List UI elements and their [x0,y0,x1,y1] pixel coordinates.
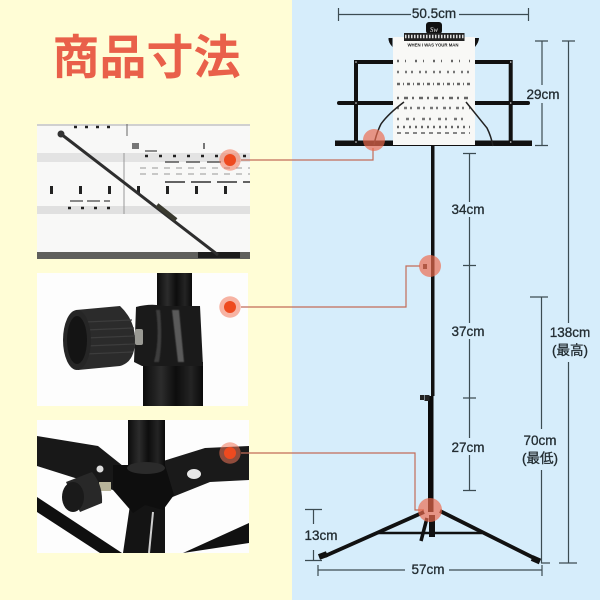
dimension: leg height 13cm: 13cm [304,528,338,543]
clip: Sw [430,26,438,34]
dimension: segment 37cm [451,266,485,398]
right arm [160,446,249,500]
white background [37,420,249,553]
title: 商品寸法 [52,31,240,84]
dimension: minimum height 70cm: 70cm [523,433,557,448]
sheet music [393,37,475,145]
arm hole [187,469,201,479]
lower braces [37,497,249,553]
dimension: maximum height 138cm: (最高) [552,342,588,358]
music stand [319,22,540,562]
panel: height adjustment knob photo [37,273,248,406]
dimension: segment 37cm: 37cm [451,324,485,339]
marker dot: panel 3 [219,442,241,464]
panel: tripod joint photo [37,420,249,553]
dimension: minimum height 70cm [522,297,558,563]
left background panel [0,0,292,600]
marker dot: panel 2 [219,296,241,318]
page holder arm [58,130,218,255]
leg gap [149,512,153,553]
frame joints [355,61,512,143]
sheet music background [37,124,250,259]
centre hub [113,465,174,513]
dimension: width 50.5cm: 50.5cm [412,6,456,21]
lower pole [143,362,203,406]
connector: panel 3 to tripod [241,453,424,510]
connector: panel 2 to height clamp [241,266,420,307]
song title: WHEN I WAS YOUR MAN [407,42,459,48]
dimension: base width 57cm: 57cm [411,562,445,577]
knob [62,472,111,512]
marker dot: panel 1 [219,149,241,171]
dimension: base width 57cm [318,562,542,577]
clip [388,22,479,47]
centre pole [420,146,434,512]
clamp body [134,305,203,366]
highlight circle: tripod joint [418,498,442,522]
white background [37,273,248,406]
dimension: segment 34cm [451,154,485,265]
panel: page holder arm photo [37,124,250,259]
highlight circle: height clamp [419,255,441,277]
dimension: desk height 29cm: 29cm [526,87,560,102]
knob [63,306,135,370]
dimension: segment 27cm: 27cm [451,440,485,455]
dimension: maximum height 138cm [550,41,590,563]
staff lines [397,61,470,133]
dimension: minimum height 70cm: (最低) [522,451,558,466]
staves [37,124,250,214]
upper pole [157,273,192,307]
highlight circle: page holder [363,129,385,151]
page holder arms [374,102,493,146]
dimension: width 50.5cm [338,6,528,21]
left arm [37,436,128,490]
screw [135,329,143,345]
tripod legs [319,511,540,562]
dimension: segment 34cm: 34cm [451,202,485,217]
small bolt [96,466,104,472]
dimension: leg height 13cm [304,510,338,560]
desk frame [335,60,532,146]
upper pole [127,420,165,474]
bottom tray edge [37,252,250,259]
lower leg [123,505,165,553]
dimension: segment 27cm [451,398,485,490]
dimension: desk height 29cm [526,41,560,146]
dimension: maximum height 138cm: 138cm [550,325,590,340]
right background panel [292,0,600,600]
connector: panel 1 to desk [241,148,373,160]
